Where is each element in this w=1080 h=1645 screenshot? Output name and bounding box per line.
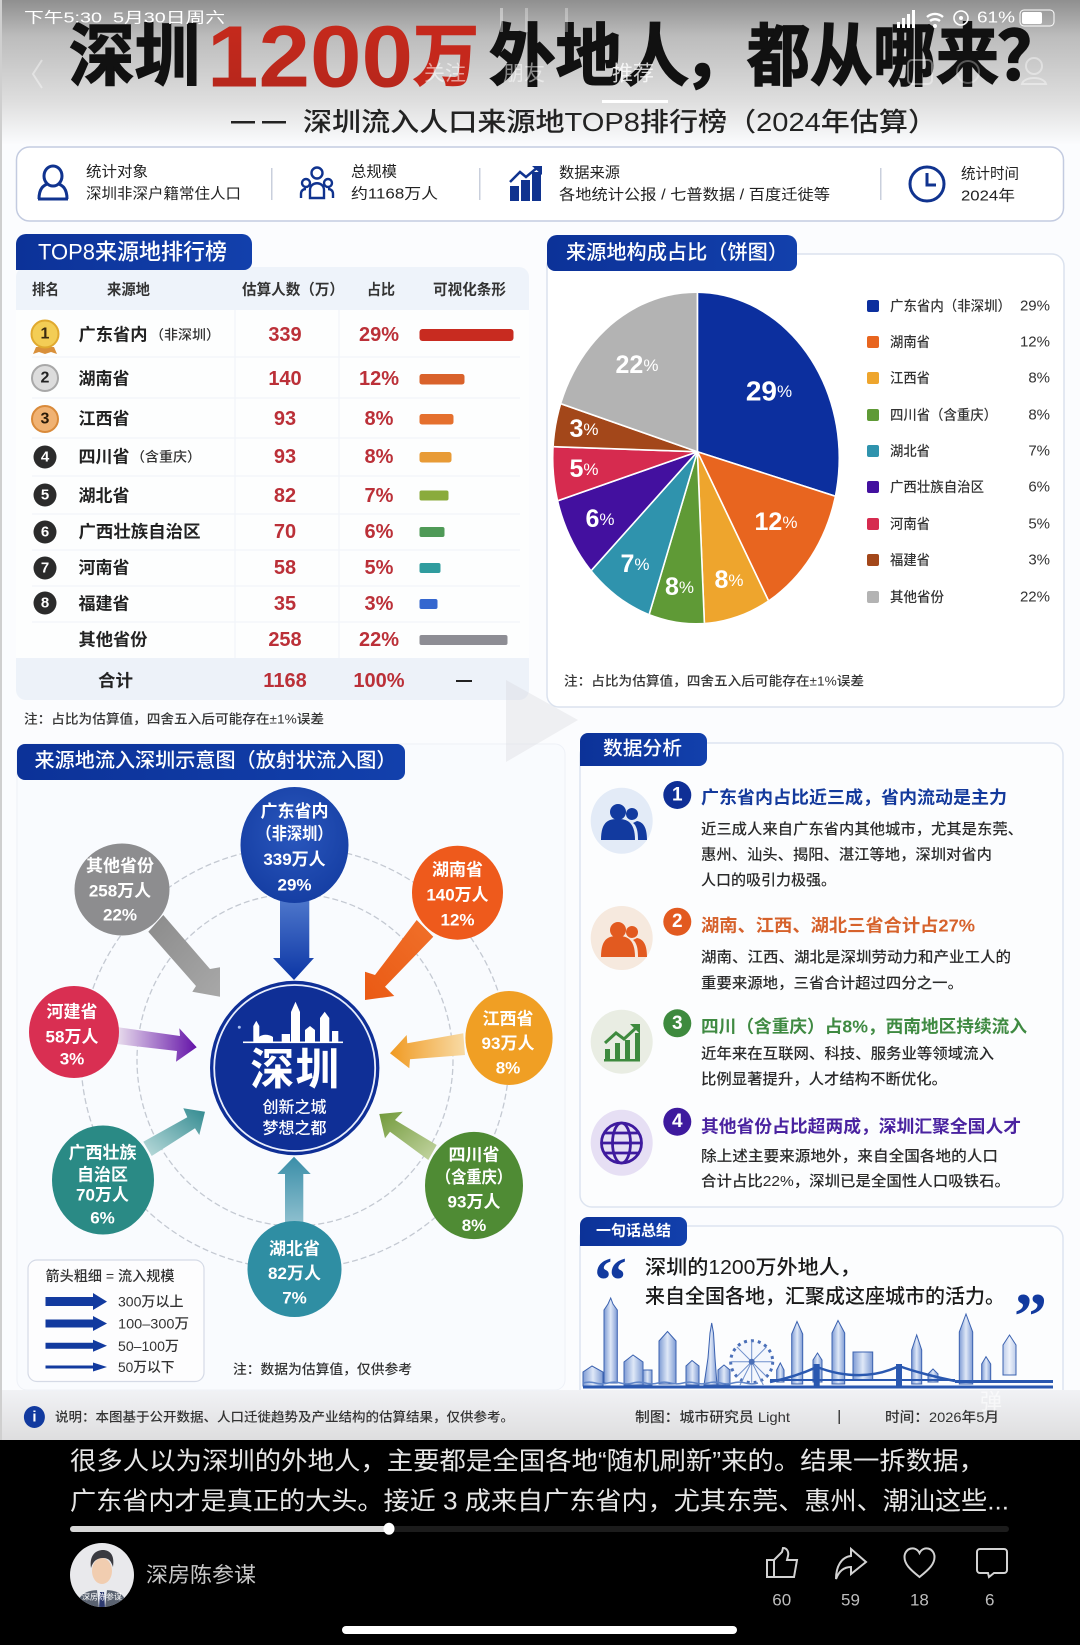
node: Hubei: 湖北省 (269, 1240, 320, 1258)
arrow: others (148, 915, 220, 997)
table header: 估算人数（万） (242, 280, 344, 298)
video caption: 广东省内才是真正的大头。接近 3 成来自广东省内，尤其东莞、惠州、潮汕这些... (70, 1488, 1009, 1516)
footer note band: 弹 (980, 1390, 1002, 1414)
icon: thumbs up (767, 1548, 797, 1577)
arrow width legend: 100–300万 (118, 1316, 189, 1332)
node: other provinces: 258万人 (89, 882, 151, 900)
icon: heart (904, 1548, 934, 1577)
pie legend: 江西省 (890, 370, 930, 386)
row 4: （含重庆） (131, 448, 201, 464)
insight 1: 近三成人来自广东省内其他城市，尤其是东莞、 (701, 820, 1023, 838)
pie legend: 7% (1028, 442, 1050, 460)
title: 1200 (207, 8, 413, 106)
info: statistics time (961, 166, 1019, 204)
row 5: 湖北省 (78, 486, 130, 506)
heading tab (580, 733, 707, 766)
node: Hubei: 82万人 (268, 1264, 321, 1283)
node: Guangxi: 广西壮族 (68, 1142, 136, 1162)
pie legend: 3% (1028, 552, 1050, 568)
arrow: Guangxi (143, 1108, 205, 1156)
pie labels: 8% (665, 573, 694, 601)
arrow: Hunan (365, 920, 433, 1000)
icon: clock (910, 167, 944, 201)
node: Hunan (412, 846, 503, 940)
info: data source: 各地统计公报 / 七普数据 / 百度迁徙等 (559, 186, 830, 204)
node: Guangxi: 自治区 (77, 1164, 128, 1184)
node: Hunan: 140万人 (426, 886, 489, 904)
row 5: 82 (274, 485, 296, 507)
pie legend: 5% (1028, 516, 1050, 532)
row: other provinces (78, 629, 508, 651)
title (69, 8, 1065, 106)
pie legend: 6% (1028, 478, 1050, 496)
row 3 (32, 406, 454, 432)
node: Guangxi: 6% (90, 1208, 115, 1228)
row 1 (32, 320, 514, 354)
node: Guangdong: 广东省内 (260, 801, 328, 821)
pie legend: 22% (1020, 588, 1050, 606)
pie legend: 广西壮族自治区 (890, 479, 984, 495)
like count: 60 (772, 1590, 791, 1610)
info: target population: 深圳非深户籍常住人口 (86, 186, 241, 202)
pie labels: 12% (755, 508, 797, 536)
skyline illustration (583, 1298, 1053, 1388)
row 7: 58 (274, 557, 296, 579)
pie legend: 河南省 (890, 516, 930, 532)
insight 3 (591, 1009, 1027, 1088)
info: data source (559, 164, 830, 204)
quote mark close: ” (1014, 1280, 1047, 1354)
heart count: 18 (910, 1590, 929, 1610)
node: Jiangxi: 江西省 (482, 1010, 534, 1028)
arrow width legend: 300万以上 (118, 1294, 184, 1310)
app overlay: status bar and navigation: 关注 (424, 62, 466, 86)
progress bar (70, 1523, 1009, 1535)
center: Shenzhen: 深圳 (250, 1046, 339, 1094)
row 1: 29% (359, 324, 399, 346)
pie legend: 四川省（含重庆） (890, 407, 997, 423)
arrow width legend: 50万以下 (118, 1359, 174, 1375)
insight 1: 广东省内占比近三成，省内流动是主力 (701, 788, 1007, 808)
node: Guangxi: 70万人 (76, 1186, 129, 1204)
node: Henan: 河建省 (46, 1002, 98, 1022)
icon: growth chart (604, 1024, 640, 1062)
node: Guangdong: 29% (277, 876, 312, 894)
pie legend: 其他省份 (890, 589, 944, 605)
insight 1: 人口的吸引力极强。 (701, 872, 836, 889)
row 7: 7 (41, 560, 49, 576)
row: total: 1168 (263, 670, 307, 692)
skyline in center (238, 1002, 343, 1043)
insight 3: 比例显著提升，人才结构不断优化。 (701, 1071, 947, 1088)
panel: data analysis (580, 733, 1063, 1207)
insight 2: 2 (672, 911, 683, 932)
icon: people blue (601, 804, 647, 840)
row 8: 35 (274, 593, 296, 615)
heading tab (547, 235, 797, 271)
icon: group (301, 168, 333, 198)
insight 2 (591, 906, 1011, 992)
quote text: 来自全国各地，汇聚成这座城市的活力。 (645, 1285, 1005, 1308)
heading tab (16, 234, 252, 270)
pie legend: 湖北省 (890, 443, 930, 459)
quote text (645, 1256, 1005, 1308)
pie labels: 3% (569, 415, 599, 443)
arrow: Hubei (277, 1157, 311, 1224)
row: total (98, 670, 472, 692)
home indicator (342, 1626, 737, 1634)
row 5 (34, 484, 448, 507)
quote mark open: “ (594, 1244, 627, 1318)
pie labels (569, 351, 797, 601)
icon: globe (602, 1123, 642, 1163)
row 6: 6% (365, 521, 394, 543)
info strip (16, 147, 1064, 221)
insight 1: 1 (672, 784, 683, 806)
row 8 (34, 592, 438, 615)
pie legend: 福建省 (890, 552, 930, 568)
arrow width legend (28, 1260, 204, 1382)
row 1: （非深圳） (150, 328, 220, 342)
node: Henan: 3% (60, 1050, 84, 1068)
video play button watermark (506, 680, 578, 762)
heading tab (17, 744, 405, 780)
row 2: 140 (268, 368, 302, 390)
pie labels: 8% (714, 566, 744, 594)
row 4: 8% (365, 446, 394, 468)
avatar (70, 1543, 134, 1610)
row 8: 3% (365, 593, 394, 615)
title: ， (683, 19, 751, 95)
row 2: 12% (359, 368, 399, 390)
bridge (770, 1366, 955, 1382)
share count: 59 (841, 1590, 860, 1610)
row 5: 7% (365, 485, 394, 507)
title: ？ (997, 19, 1065, 95)
node: Jiangxi: 8% (496, 1058, 520, 1078)
node: Guangdong (240, 787, 348, 903)
node: Sichuan: （含重庆） (436, 1167, 512, 1187)
app overlay: status bar and navigation: 推荐 (612, 62, 654, 86)
info: target population: 统计对象 (86, 164, 148, 180)
subtitle: 深圳流入人口来源地TOP8排行榜（2024年估算） (303, 107, 937, 137)
info: total scale (351, 164, 438, 202)
node: Hunan: 湖南省 (432, 860, 483, 880)
icon: info (24, 1406, 45, 1428)
pie legend: 12% (1020, 334, 1050, 350)
pie labels: 7% (620, 550, 650, 578)
pie labels: 5% (569, 455, 599, 483)
panel: pie chart (510, 235, 1064, 707)
arrow width legend: 箭头粗细 = 流入规模 (46, 1268, 174, 1284)
node: other provinces (74, 844, 170, 936)
table header (32, 280, 506, 298)
pie legend: 8% (1028, 406, 1050, 424)
row 3: 3 (41, 410, 50, 428)
heading tab: 数据分析 (603, 738, 682, 760)
arrow: Sichuan (379, 1112, 437, 1160)
insight 2: 湖南、江西、湖北是深圳劳动力和产业工人的 (701, 949, 1011, 966)
insight 2: 重要来源地，三省合计超过四分之一。 (701, 974, 963, 992)
insight 4: 除上述主要来源地外，来自全国各地的人口 (701, 1147, 998, 1165)
heading tab: 一句话总结 (596, 1222, 671, 1240)
footer note band: 时间：2026年5月 (885, 1409, 999, 1425)
pie labels: 6% (585, 505, 615, 533)
row 6: 广西壮族自治区 (78, 522, 200, 542)
node: Henan (29, 986, 119, 1078)
node: other provinces: 22% (103, 906, 137, 924)
insight 4: 合计占比22%，深圳已是全国性人口吸铁石。 (701, 1172, 1010, 1190)
row 4 (34, 446, 452, 468)
info: statistics time: 2024年 (961, 188, 1015, 204)
title: 外地人 (489, 19, 689, 95)
row 4: 93 (274, 446, 296, 468)
panel: TOP8 ranking table (16, 234, 529, 700)
info: target population (86, 164, 241, 202)
row 2: 湖南省 (78, 370, 130, 388)
heading tab (580, 1217, 687, 1246)
app overlay: status bar and navigation: 61% (977, 10, 1015, 26)
title: 万 (413, 19, 479, 95)
node: Hubei (248, 1221, 342, 1317)
table note: 注：占比为估算值，四舍五入后可能存在±1%误差 (24, 712, 324, 726)
node: Hunan: 12% (440, 910, 475, 930)
heading tab: 来源地流入深圳示意图（放射状流入图） (34, 749, 396, 772)
insight 3: 3 (672, 1013, 683, 1034)
comment count: 6 (985, 1590, 994, 1610)
row 2 (32, 365, 464, 391)
title: 都从哪来 (747, 19, 999, 95)
row 3: 8% (365, 408, 394, 430)
panel: radial inflow diagram (17, 744, 565, 1390)
pie (554, 293, 838, 623)
row: other provinces: 22% (359, 629, 399, 651)
insight 4: 其他省份占比超两成，深圳汇聚全国人才 (701, 1117, 1021, 1137)
insight 4 (591, 1108, 1021, 1190)
heading tab: 来源地构成占比（饼图） (566, 241, 788, 264)
row 6 (34, 520, 444, 544)
row 3: 江西省 (78, 410, 130, 428)
icon: share (836, 1549, 866, 1579)
diagram note: 注：数据为估算值，仅供参考 (233, 1361, 412, 1377)
insight 1: 惠州、汕头、揭阳、湛江等地，深圳对省内 (701, 846, 992, 864)
node: Sichuan: 93万人 (448, 1192, 500, 1212)
insight 3: 四川（含重庆）占8%，西南地区持续流入 (701, 1017, 1027, 1037)
row 7: 河南省 (78, 558, 130, 578)
pie legend: 广东省内（非深圳） (890, 298, 1011, 314)
info: data source: 数据来源 (559, 164, 620, 182)
row: total: 100% (353, 670, 405, 692)
app overlay: status bar and navigation: 朋友 (503, 62, 545, 86)
node: Sichuan: 8% (462, 1216, 486, 1235)
center: Shenzhen (210, 981, 379, 1155)
row 8: 8 (41, 594, 49, 612)
row 6: 70 (274, 521, 296, 543)
row 6: 6 (41, 524, 49, 540)
node: Sichuan (425, 1132, 523, 1239)
footer note band: 说明：本图基于公开数据、人口迁徙趋势及产业结构的估算结果，仅供参考。 (55, 1410, 514, 1424)
row 2: 2 (41, 370, 50, 386)
title: 深圳 (69, 19, 200, 95)
node: Jiangxi (465, 991, 553, 1085)
row 4: 4 (41, 448, 50, 466)
info: total scale: 总规模 (351, 164, 397, 180)
row: other provinces: 258 (268, 629, 302, 651)
pie note: 注：占比为估算值，四舍五入后可能存在±1%误差 (564, 674, 864, 688)
author name: 深房陈参谋 (146, 1564, 256, 1587)
avatar: 深房陈参谋 (82, 1592, 122, 1602)
quote text: 深圳的1200万外地人， (645, 1256, 861, 1279)
row 4: 四川省 (78, 448, 130, 466)
node: Jiangxi: 93万人 (482, 1034, 534, 1053)
node: Guangxi (52, 1126, 154, 1234)
insight 2: 湖南、江西、湖北三省合计占27% (701, 916, 975, 936)
node: Hubei: 7% (282, 1288, 307, 1308)
pie legend (867, 298, 1050, 606)
video caption: 很多人以为深圳的外地人，主要都是全国各地“随机刷新”来的。结果一拆数据， (70, 1448, 985, 1476)
panel: one sentence summary (580, 1217, 1063, 1390)
node: Guangdong: 339万人 (263, 850, 326, 869)
arrow: Jiangxi (390, 1033, 465, 1068)
arrow width legend: 50–100万 (118, 1338, 179, 1354)
icon: people orange (601, 922, 647, 957)
node: Guangdong: （非深圳） (256, 824, 332, 844)
node: Henan: 58万人 (46, 1028, 98, 1046)
row 1: 339 (268, 324, 302, 346)
row 7 (34, 556, 440, 580)
pie legend: 湖南省 (890, 334, 930, 350)
pie labels: 22% (616, 351, 658, 379)
app overlay: status bar and navigation: 下午5:30 5月30日周六 (24, 10, 225, 26)
row 3: 93 (274, 408, 296, 430)
insight 1 (591, 781, 1023, 889)
insight 3: 近年来在互联网、科技、服务业等领域流入 (701, 1044, 994, 1062)
icon: info: i (32, 1408, 36, 1426)
video caption (70, 1448, 1009, 1516)
pie labels: 29% (746, 376, 792, 406)
icon: comment (977, 1549, 1007, 1577)
insight 4: 4 (672, 1111, 683, 1132)
row 8: 福建省 (78, 594, 130, 614)
row 1: 1 (41, 326, 50, 342)
node: other provinces: 其他省份 (86, 856, 154, 876)
row: total: 合计 (98, 670, 133, 690)
center: Shenzhen: 创新之城 (262, 1098, 327, 1116)
icon: rising bar chart (510, 166, 542, 201)
row 5: 5 (41, 486, 49, 504)
pie legend: 8% (1028, 370, 1050, 386)
icon: person (38, 166, 68, 199)
table header: 可视化条形 (433, 280, 506, 298)
table header: 占比 (367, 282, 395, 298)
row 7: 5% (365, 557, 394, 579)
footer note band (24, 1390, 1002, 1428)
arrow: Guangdong (273, 898, 314, 980)
row: other provinces: 其他省份 (78, 630, 148, 650)
table header: 来源地 (107, 282, 150, 298)
heading tab: TOP8来源地排行榜 (38, 240, 227, 264)
center: Shenzhen: 梦想之都 (262, 1120, 327, 1138)
arrow: Henan (117, 1027, 197, 1062)
app overlay: status bar and navigation (24, 8, 1054, 103)
row 1: 广东省内 (78, 324, 148, 344)
footer note band: 制图：城市研究员 Light (635, 1409, 790, 1425)
info: total scale: 约1168万人 (351, 186, 438, 202)
table header: 排名 (32, 280, 59, 298)
node: Sichuan: 四川省 (448, 1146, 500, 1164)
pie legend: 29% (1020, 298, 1050, 314)
info: statistics time: 统计时间 (961, 166, 1019, 182)
